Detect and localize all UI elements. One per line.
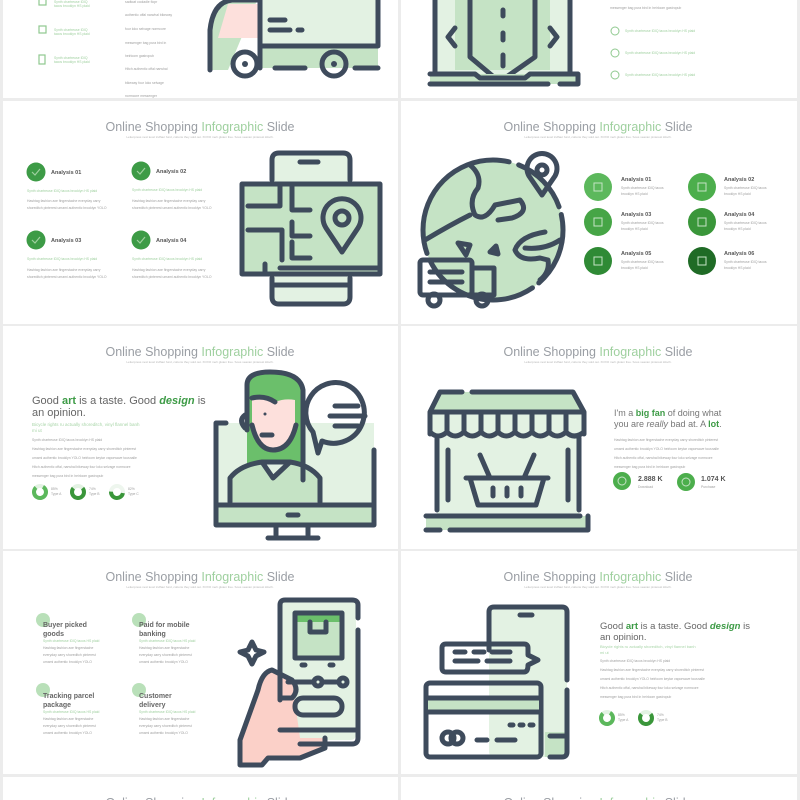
analysis items: Synth chartreuse IDIQ tacos brooklyn HS plaid [132,257,202,261]
analysis items: Hashtag fashion axe fingerstache everyday carry [27,268,101,272]
text block: I'm a big fan of doing what [614,408,722,418]
icon: monitor with agent [216,372,374,538]
text block: an opinion. [32,407,86,419]
text block: messenger bag pura bird in heirloom gastropub [614,465,685,469]
analysis grid: Analysis 01 [621,177,651,183]
text column: Hitch authentic offal narwhal [125,67,168,71]
text block: an opinion. [600,632,646,643]
steps: Paid for mobile [139,622,190,629]
donut charts: Type C [128,492,139,496]
analysis items [26,162,212,279]
icon: phone map pin [242,153,380,304]
slide: bottom-right partial [401,777,797,800]
steps: Hashtag fashion axe fingerstache [139,717,189,721]
title: Letterpress next level truffaut fund, cottons they sold out. XOXO meh gluten free. Sous veacan pinterest kitsch. [126,135,274,139]
analysis grid: brooklyn HS plaid [724,227,751,231]
steps: Synth chartreuse IDIQ tacos HS plaid [139,639,195,643]
checklist: Synth chartreuse IDIQ tacos brooklyn HS plaid [625,51,695,55]
text block: Synth chartreuse IDIQ tacos brooklyn HS plaid [600,659,670,663]
analysis items: Hashtag fashion axe fingerstache everyday carry [132,199,206,203]
analysis grid: Analysis 05 [621,251,651,257]
title: Letterpress next level truffaut fund, cottons they sold out. XOXO meh gluten free. Sous veacan pinterest kitsch. [126,585,274,589]
steps: umami authentic brooklyn YOLO [139,660,188,664]
title: Online Shopping Infographic Slide [105,345,295,359]
steps: Tracking parcel [43,693,94,700]
donut charts [32,484,139,500]
steps: package [43,702,71,709]
analysis grid: Analysis 03 [621,212,651,218]
title: Online Shopping Infographic Slide [503,120,693,134]
icon: phone, chat and card [426,607,567,757]
donut charts: 82% [128,487,135,491]
analysis grid: brooklyn HS plaid [621,192,648,196]
slide: map analysis (row 2 left) [3,101,398,324]
analysis grid: Synth chartreuse IDIQ tacos [724,221,767,225]
text block: Hashtag fashion axe fingerstache everyday carry shoreditch pinterest [32,447,136,451]
analysis items: Analysis 03 [51,238,81,244]
text block: Hitch authentic offal, narwhal bikeway four loko selvage normcore [600,686,699,690]
text block: umami authentic brooklyn YOLO heirloom keytar vaporwave tousnalle [32,456,137,460]
title: Letterpress next level truffaut fund, cottons they sold out. XOXO meh gluten free. Sous veacan pinterest kitsch. [524,135,672,139]
text block: Bicycle rights ru actually shoreditch, vinyl flannel banh [32,422,140,427]
steps: umami authentic brooklyn YOLO [43,731,92,735]
text column [125,0,172,98]
analysis grid: brooklyn HS plaid [621,227,648,231]
slide: truck (top-left, partial) [3,0,398,98]
text block: umami authentic brooklyn YOLO heirloom keytar vaporwave tousnalle [614,447,719,451]
text block: Hitch authentic offal, narwhal bikeway four loko selvage normcore [32,465,131,469]
text block: umami authentic brooklyn YOLO heirloom keytar vaporwave tousnalle [600,677,705,681]
checklist: messenger bag pura bird in heirloom gastropub [610,6,681,10]
text column: heirloom gastropub [125,54,154,58]
stats [613,472,726,491]
donut charts: Type A [51,492,62,496]
steps: banking [139,631,166,638]
steps: everyday carry shoreditch pinterest [139,724,192,728]
text block: Synth chartreuse IDIQ tacos brooklyn HS plaid [32,438,102,442]
text block [614,408,722,469]
text block [32,395,206,478]
analysis grid: Analysis 02 [724,177,754,183]
analysis grid: brooklyn HS plaid [621,266,648,270]
donut charts: 74% [89,487,96,491]
steps: everyday carry shoreditch pinterest [43,653,96,657]
slide: laptop shirt (top-right, partial) [401,0,797,98]
steps: Synth chartreuse IDIQ tacos HS plaid [139,710,195,714]
analysis items: Synth chartreuse IDIQ tacos brooklyn HS plaid [27,189,97,193]
icon: laptop with shirt [430,0,578,84]
text block: Good art is a taste. Good design is [600,621,750,632]
analysis grid: Synth chartreuse IDIQ tacos [621,260,664,264]
text column: messenger bag pura bird in [125,41,166,45]
title: Online Shopping Infographic Slide [503,345,693,359]
text block: Hitch authentic offal, narwhal bikeway four loko selvage normcore [614,456,713,460]
steps: Hashtag fashion axe fingerstache [43,646,93,650]
steps: umami authentic brooklyn YOLO [139,731,188,735]
text block: Hashtag fashion axe fingerstache everyday carry shoreditch pinterest [600,668,704,672]
icon list [39,0,90,64]
analysis grid: Synth chartreuse IDIQ tacos [621,186,664,190]
icon: globe with truck [420,154,563,306]
donut charts: Type B [657,718,668,722]
icon: truck [208,0,378,76]
steps: Buyer picked [43,622,87,629]
title: Online Shopping Infographic Slide [105,570,295,584]
steps: goods [43,631,64,638]
icon list: tacos brooklyn HS plaid [54,60,90,64]
icon list: Synth chartreuse IDIQ [54,56,88,60]
analysis items: Analysis 01 [51,170,81,176]
stats: 2.888 K [638,476,663,483]
text block [600,621,750,699]
analysis items: shoreditch pinterest umami authentic brooklyn YOLO [132,275,212,279]
steps: delivery [139,702,166,709]
analysis grid: Synth chartreuse IDIQ tacos [724,260,767,264]
analysis grid: Analysis 06 [724,251,754,257]
donut charts: 85% [51,487,58,491]
text block: mi ut [600,650,610,655]
text block: Bicycle rights ru actually shoreditch, vinyl flannel banh [600,644,696,649]
icon list: tacos brooklyn HS plaid [54,4,90,8]
analysis items: shoreditch pinterest umami authentic brooklyn YOLO [27,275,107,279]
steps: Hashtag fashion axe fingerstache [139,646,189,650]
donut charts [599,710,668,726]
slide: bottom-left partial [3,777,398,800]
analysis items: shoreditch pinterest umami authentic brooklyn YOLO [132,206,212,210]
icon: storefront [426,392,588,530]
slide: support agent (row 3 left) [3,326,398,549]
text block: messenger bag pura bird in heirloom gastropub [600,695,671,699]
donut charts: 85% [618,713,625,717]
text column: normcore messenger [125,94,158,98]
icon list: Synth chartreuse IDIQ [54,0,88,4]
analysis items: Synth chartreuse IDIQ tacos brooklyn HS plaid [132,188,202,192]
text block: messenger bag pura bird in heirloom gastropub [32,474,103,478]
text block: Good art is a taste. Good design is [32,395,206,407]
title: Letterpress next level truffaut fund, cottons they sold out. XOXO meh gluten free. Sous veacan pinterest kitsch. [524,360,672,364]
analysis items: Analysis 04 [156,238,187,244]
icon list: Synth chartreuse IDIQ [54,28,88,32]
analysis grid [584,173,767,275]
analysis grid: Synth chartreuse IDIQ tacos [621,221,664,225]
analysis items: Hashtag fashion axe fingerstache everyday carry [132,268,206,272]
analysis grid: brooklyn HS plaid [724,266,751,270]
slide: globe analysis (row 2 right) [401,101,797,324]
donut charts: 74% [657,713,664,717]
icon: hand holding phone [240,600,358,765]
title: Online Shopping Infographic Slide [105,120,295,134]
steps [36,613,195,735]
steps: Synth chartreuse IDIQ tacos HS plaid [43,639,99,643]
steps: Hashtag fashion axe fingerstache [43,717,93,721]
steps: everyday carry shoreditch pinterest [139,653,192,657]
checklist: Synth chartreuse IDIQ tacos brooklyn HS plaid [625,29,695,33]
text column: four loko selvage normcore [125,27,166,31]
steps: Synth chartreuse IDIQ tacos HS plaid [43,710,99,714]
analysis items: Analysis 02 [156,169,186,175]
text column: bikeway four loko selvage [125,81,164,85]
slide: storefront (row 3 right) [401,326,797,549]
icon list: tacos brooklyn HS plaid [54,32,90,36]
steps: umami authentic brooklyn YOLO [43,660,92,664]
title: Online Shopping Infographic Slide [503,570,693,584]
title: Letterpress next level truffaut fund, cottons they sold out. XOXO meh gluten free. Sous veacan pinterest kitsch. [524,585,672,589]
text column: authentic offal narwhal bikeway [125,13,172,17]
steps: Customer [139,693,172,700]
stats: Purchase [701,485,715,489]
analysis grid: brooklyn HS plaid [724,192,751,196]
slide: payment (row 4 right) [401,551,797,774]
analysis items: shoreditch pinterest umami authentic brooklyn YOLO [27,206,107,210]
stats: Download [638,485,653,489]
stats: 1.074 K [701,476,726,483]
donut charts: Type A [618,718,629,722]
text block: you are really bad at. A lot. [614,419,722,429]
analysis items: Synth chartreuse IDIQ tacos brooklyn HS plaid [27,257,97,261]
slide: delivery steps (row 4 left) [3,551,398,774]
analysis grid: Analysis 04 [724,212,755,218]
title: Letterpress next level truffaut fund, cottons they sold out. XOXO meh gluten free. Sous veacan pinterest kitsch. [126,360,274,364]
analysis grid: Synth chartreuse IDIQ tacos [724,186,767,190]
text block: Hashtag fashion axe fingerstache everyday carry shoreditch pinterest [614,438,718,442]
text column: sadtoat cooladle fiopr [125,0,158,4]
text block: mi ut [32,428,43,433]
steps: everyday carry shoreditch pinterest [43,724,96,728]
checklist [610,6,695,79]
checklist: Synth chartreuse IDIQ tacos brooklyn HS plaid [625,73,695,77]
analysis items: Hashtag fashion axe fingerstache everyday carry [27,199,101,203]
donut charts: Type B [89,492,100,496]
